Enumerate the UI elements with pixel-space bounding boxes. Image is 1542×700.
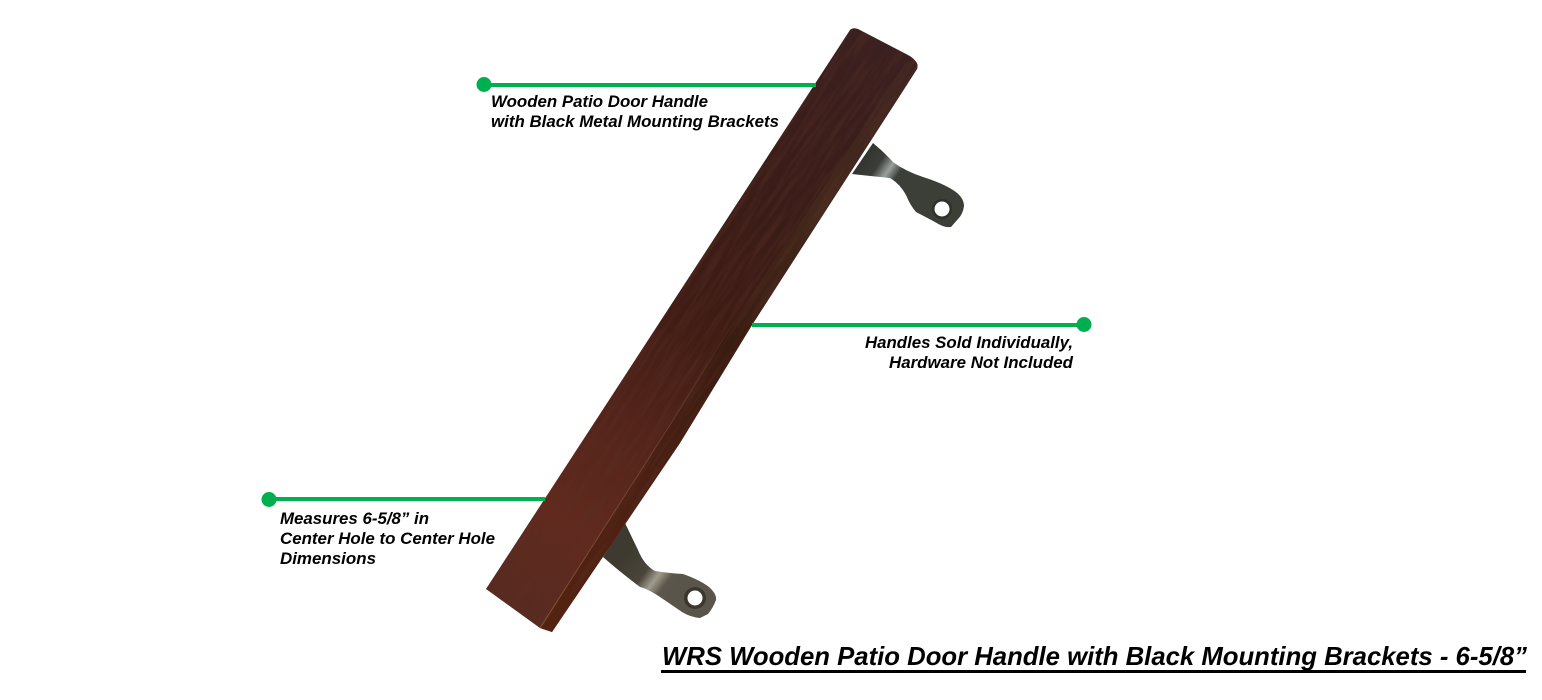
text: measurements: Dimensions xyxy=(280,550,376,568)
text: sold individually: Hardware Not Included xyxy=(889,354,1074,372)
callout line: bottom left xyxy=(262,492,545,507)
text: measurements: Center Hole to Center Hole xyxy=(280,530,495,548)
title: WRS Wooden Patio Door Handle with Black Mounting Brackets - 6-5/8” xyxy=(662,641,1527,671)
callout: wooden handle description xyxy=(476,77,816,131)
text: handle description: with Black Metal Mounting Brackets xyxy=(491,113,779,131)
icon: upper mounting bracket xyxy=(852,143,964,227)
callout: measurements xyxy=(262,492,545,568)
callout line: top left xyxy=(476,77,816,92)
text: sold individually: Handles Sold Individually, xyxy=(865,334,1073,352)
callout: sold individually xyxy=(752,317,1092,372)
icon: lower mounting bracket xyxy=(603,523,716,618)
text: handle description: Wooden Patio Door Handle xyxy=(491,93,708,111)
text: measurements: Measures 6-5/8” in xyxy=(280,510,429,528)
icon: wooden handle xyxy=(486,28,918,632)
callout line: middle right xyxy=(752,317,1092,332)
infographic: wooden patio door handle xyxy=(262,28,1527,673)
